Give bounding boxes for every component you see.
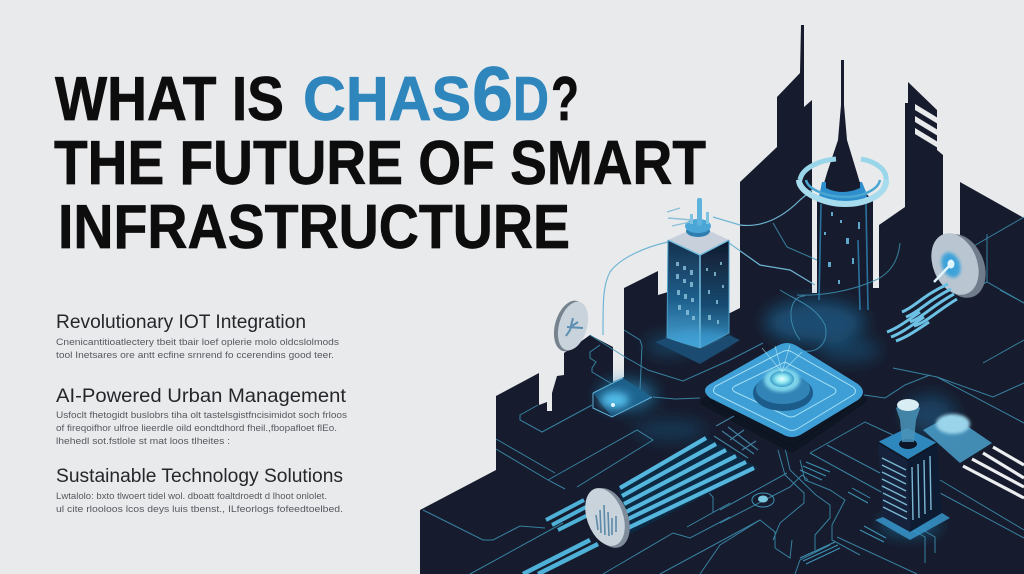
tower body lights xyxy=(824,212,860,284)
title: D xyxy=(513,65,549,134)
title: CHAS xyxy=(303,65,471,134)
text block: Sustainable Technology Solutions xyxy=(56,466,343,515)
small signal disc left xyxy=(548,297,593,355)
central processor chip xyxy=(703,343,864,450)
title: WHAT IS xyxy=(55,65,284,134)
title: INFRASTRUCTURE xyxy=(58,193,570,262)
wavy data ribbons xyxy=(887,284,957,341)
cable tail stripes xyxy=(546,500,590,530)
circuit traces xyxy=(423,217,1024,574)
text block: Revolutionary IOT Integration xyxy=(56,312,339,361)
text block: AI-Powered Urban Management: Usfoclt fhetogidt buslobrs tiha olt tastelsgistfncisimidot soch frloos xyxy=(56,410,347,421)
title xyxy=(54,52,706,262)
text block: Sustainable Technology Solutions: Sustainable Technology Solutions xyxy=(56,466,343,487)
title: THE FUTURE OF SMART xyxy=(54,129,706,198)
ambient blue glow xyxy=(599,300,956,535)
satellite disc right xyxy=(923,226,995,305)
bulb xyxy=(899,439,917,449)
ring back xyxy=(800,159,836,180)
smart city illustration xyxy=(420,25,1024,574)
text block: Revolutionary IOT Integration: tool Inetsares ore antt ecfine srnrend fo ccerendins good teer. xyxy=(56,350,334,361)
cone collar xyxy=(818,182,868,202)
blue pad with white stripes xyxy=(923,414,1024,498)
text block: AI-Powered Urban Management: AI-Powered Urban Management xyxy=(56,386,347,407)
city skyline silhouette xyxy=(420,25,1024,574)
cable connector mesh xyxy=(714,416,758,458)
skyscraper window stripes xyxy=(915,104,938,148)
text block: Sustainable Technology Solutions: Lwtalolo: bxto tlwoert tidel wol. dboatt foaltdroedt d lhoot onlolet. xyxy=(56,491,327,502)
text block: AI-Powered Urban Management: of fireqoifhor ulfroe lieerdle oild eondtdhord fheil.,fbopafloet flEo. xyxy=(56,423,337,434)
right lower tower with bulb xyxy=(875,399,950,540)
lower light bars xyxy=(523,540,598,574)
title: ? xyxy=(551,65,579,134)
text block: Revolutionary IOT Integration: Revolutionary IOT Integration xyxy=(56,312,306,333)
chip core button xyxy=(753,375,813,411)
text block: AI-Powered Urban Management xyxy=(56,386,347,447)
glowing connector box xyxy=(593,378,652,417)
text block: Revolutionary IOT Integration: Cnenicantitioatlectery tbeit tbair loef oplerie molo oldcslolmods xyxy=(56,337,339,348)
ring front xyxy=(799,180,886,204)
text block: Sustainable Technology Solutions: ul cite rlooloos lcos deys luis tbenst., ILfeorlogs fofeedtoelbed. xyxy=(56,504,343,515)
central tower with ring xyxy=(799,159,886,310)
title: 6 xyxy=(472,52,513,137)
tower windows xyxy=(676,262,724,324)
antenna hub xyxy=(686,225,710,237)
wires xyxy=(603,190,815,335)
data cable cylinder xyxy=(523,416,758,574)
small node and hatch details xyxy=(752,462,886,564)
text block: AI-Powered Urban Management: lhehedl sot.fstlole st mat loos tlheites : xyxy=(56,436,230,447)
rooftop tower with antenna xyxy=(655,198,740,364)
